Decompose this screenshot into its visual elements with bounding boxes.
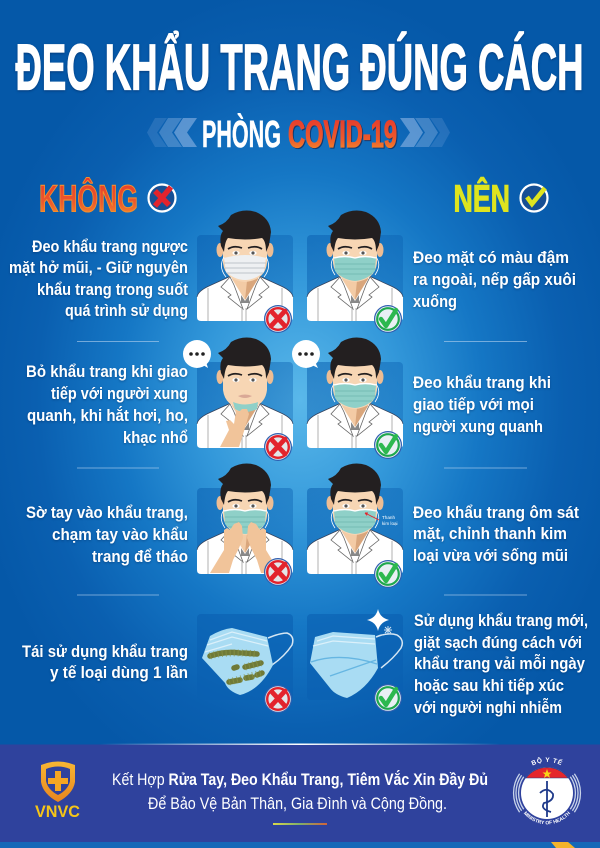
text: row 1 do: xuống bbox=[413, 292, 457, 311]
speech bubble left bbox=[183, 340, 211, 368]
heading: không: KHÔNG bbox=[39, 176, 138, 221]
text: row 3 do: loại vừa với sống mũi bbox=[413, 546, 568, 565]
text: row 3 do: mặt, chỉnh thanh kim bbox=[413, 524, 567, 543]
chevrons right bbox=[400, 118, 450, 147]
text: row 3 don't bbox=[26, 503, 188, 566]
badge: wrong 2 bbox=[264, 433, 292, 461]
text: row 2 do: giao tiếp với mọi bbox=[413, 395, 534, 414]
text: row 1 don't bbox=[9, 237, 188, 320]
logo: ministry of health: BỘ Y TẾ bbox=[531, 757, 563, 766]
icon: shield bbox=[41, 762, 75, 802]
icon: sparkle bbox=[367, 609, 389, 631]
logo: ministry of health bbox=[512, 757, 582, 824]
text: row 1 do: Đeo mặt có màu đậm bbox=[413, 248, 569, 267]
badge: right 1 bbox=[374, 305, 402, 333]
icon: x in circle bbox=[148, 184, 176, 212]
badge: wrong 4 bbox=[264, 685, 292, 713]
text: row 3 do: Đeo khẩu trang ôm sát bbox=[413, 503, 579, 522]
speech bubble right bbox=[292, 340, 320, 368]
subtitle: phòng covid-19 bbox=[147, 112, 450, 157]
text: row 1 don't: mặt hở mũi, - Giữ nguyên bbox=[9, 258, 188, 277]
text: row 2 do bbox=[413, 373, 551, 436]
panel: mask while talking bbox=[307, 338, 403, 448]
footer text: Kết Hợp Rửa Tay, Đeo Khẩu Trang, Tiêm Vắc Xin Đầy Đủ bbox=[112, 770, 488, 789]
footer text: Để Bảo Vệ Bản Thân, Gia Đình và Cộng Đồng. bbox=[148, 794, 447, 813]
covid-19 shadow: COVID-19 bbox=[289, 115, 398, 157]
text: row 1 don't: Đeo khẩu trang ngược bbox=[32, 237, 188, 256]
text: row 2 do: Đeo khẩu trang khi bbox=[413, 373, 551, 392]
badge: right 3 bbox=[374, 560, 402, 588]
badge: wrong 3 bbox=[264, 558, 292, 586]
text: row 4 don't bbox=[22, 642, 188, 682]
badge: right 2 bbox=[374, 431, 402, 459]
text: row 1 do bbox=[413, 248, 576, 311]
text: row 4 don't: y tế loại dùng 1 lần bbox=[50, 663, 188, 682]
heading: nên: NÊN bbox=[454, 177, 510, 221]
badge: right 4 bbox=[374, 684, 402, 712]
panel: adjust metal strip bbox=[307, 464, 403, 574]
logo: VNVC bbox=[35, 762, 80, 821]
text: row 3 don't: trang để tháo bbox=[92, 547, 188, 566]
text: row 2 do: người xung quanh bbox=[413, 417, 543, 436]
covid-19: COVID-19 bbox=[288, 114, 397, 156]
label: metal strip bbox=[382, 515, 398, 526]
footer band bbox=[0, 744, 600, 848]
text: row 1 don't: quá trình sử dụng bbox=[65, 301, 188, 320]
text: row 2 don't bbox=[26, 362, 188, 447]
text: row 4 do: hoặc sau khi tiếp xúc bbox=[414, 676, 564, 695]
panel: white mask worn backwards bbox=[197, 211, 293, 321]
icon: small sparkle bbox=[384, 626, 392, 634]
icon: check in circle bbox=[520, 184, 548, 212]
panel: clean disposable mask bbox=[307, 609, 403, 700]
panel: dirty disposable mask bbox=[197, 614, 293, 700]
arrow to nose wire bbox=[365, 513, 379, 520]
phòng: PHÒNG bbox=[202, 112, 281, 156]
text: row 4 do bbox=[414, 611, 588, 717]
label: metal strip: kim loại bbox=[382, 521, 398, 526]
logo: ministry of health: MINISTRY OF HEALTH bbox=[524, 811, 570, 824]
text: row 2 don't: khạc nhổ bbox=[123, 428, 188, 447]
text: row 3 do bbox=[413, 503, 579, 565]
logo: VNVC: VNVC bbox=[35, 802, 80, 821]
panel: touching mask bbox=[197, 464, 293, 574]
chevrons left bbox=[147, 118, 197, 147]
text: row 1 don't: khẩu trang trong suốt bbox=[37, 280, 188, 299]
text: row 3 don't: chạm tay vào khẩu bbox=[52, 525, 188, 544]
text: row 2 don't: Bỏ khẩu trang khi giao bbox=[26, 362, 188, 381]
label: metal strip: Thanh bbox=[382, 515, 395, 520]
footer text bbox=[112, 770, 488, 813]
panel: teal mask correct side bbox=[307, 211, 403, 321]
text: row 4 do: với người nghi nhiễm bbox=[414, 698, 562, 717]
text: row 1 do: ra ngoài, nếp gấp xuôi bbox=[413, 270, 576, 289]
text: row 2 don't: quanh, khi hắt hơi, ho, bbox=[27, 406, 188, 425]
panel: mask pulled down bbox=[197, 338, 293, 448]
text: row 3 don't: Sờ tay vào khẩu trang, bbox=[26, 503, 188, 522]
text: row 4 don't: Tái sử dụng khẩu trang bbox=[22, 642, 188, 661]
text: row 2 don't: tiếp với người xung bbox=[51, 384, 188, 403]
badge: wrong 1 bbox=[264, 305, 292, 333]
